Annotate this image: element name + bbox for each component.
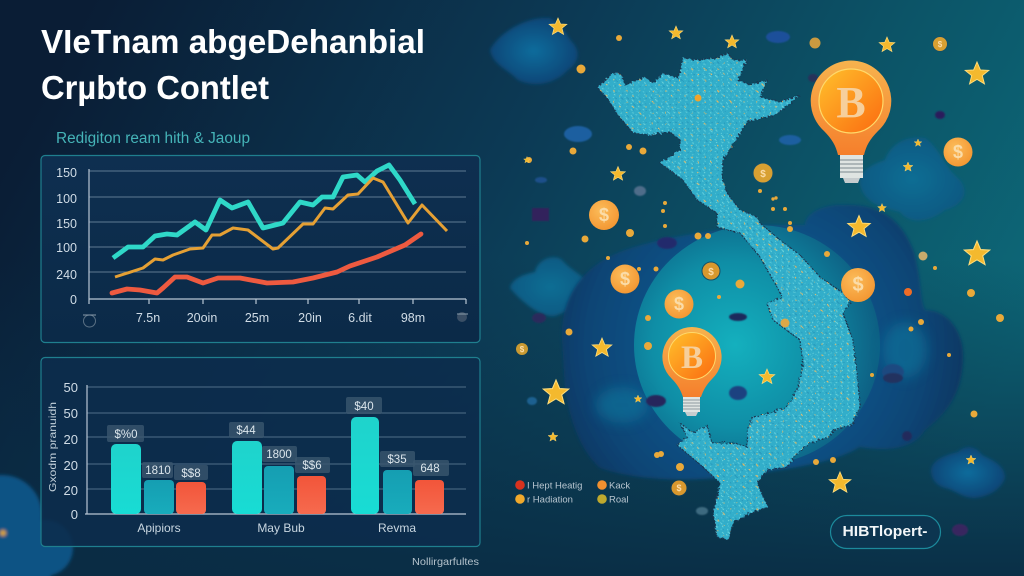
x axis labels: [136, 311, 425, 325]
value labels: 1810: [145, 465, 171, 477]
category labels: Apipiors: [137, 521, 181, 535]
group 1 bars: [111, 444, 206, 514]
value labels: 648: [420, 463, 440, 475]
cloud: bottom-left corner: [0, 475, 73, 576]
cloud: top-left of map: [490, 18, 578, 84]
panel: line chart: [41, 156, 480, 342]
x axis labels: 20in: [298, 311, 322, 325]
y axis labels: [56, 166, 77, 307]
icons: coins: $: [953, 142, 963, 162]
category labels: Revma: [378, 521, 416, 535]
teal line series: [113, 165, 415, 258]
badge: HIBTlopert-: [842, 524, 928, 540]
icons: coins: [516, 36, 972, 496]
x axis labels: 98m: [401, 311, 425, 325]
icon: small lightbulb with coin: [662, 327, 722, 416]
title: Crµbto Contlet: [41, 69, 269, 106]
icons: coins: $: [676, 483, 682, 493]
y axis labels: 150: [56, 166, 77, 180]
icons: stars: [524, 18, 990, 492]
icons: coins: $: [708, 267, 714, 278]
y axis labels: [64, 380, 78, 522]
cloud: lower-left of map: [510, 257, 591, 316]
y axis labels: 20: [64, 458, 78, 473]
y axis labels: 0: [71, 507, 78, 522]
dark smudges: [527, 31, 968, 536]
x axis labels: 7.5n: [136, 311, 160, 325]
y axis labels: 240: [56, 268, 77, 282]
y axis labels: 50: [64, 406, 78, 421]
icon: large lightbulb with coin: B: [836, 78, 866, 127]
legend: Kack: [609, 480, 630, 492]
x axis labels: 6.dit: [348, 311, 372, 325]
group 2 bars: [232, 441, 326, 514]
scattered gold dots: [525, 35, 1004, 471]
panel: bar chart: [41, 358, 480, 546]
value labels: $44: [236, 425, 256, 437]
cloud: right of big bulb: [860, 137, 964, 220]
legend: [515, 480, 630, 506]
icons: coins: $: [852, 274, 864, 296]
cloud: lower-right: [931, 447, 1005, 498]
red line series: [112, 234, 421, 293]
category labels: May Bub: [257, 521, 305, 535]
icon: small lightbulb with coin: B: [681, 340, 703, 376]
icons: coins: $: [760, 169, 766, 180]
x axis labels: 25m: [245, 311, 269, 325]
icons: coins: $: [674, 294, 684, 314]
value labels: $35: [387, 454, 407, 466]
icon: axis marker right: [457, 312, 468, 322]
value labels: $$8: [181, 468, 201, 480]
badge: [830, 516, 940, 548]
icon: large lightbulb with coin: [811, 60, 891, 183]
legend: Roal: [609, 494, 629, 506]
legend: r Hadiation: [527, 494, 573, 506]
y axis labels: 20: [64, 432, 78, 447]
rotated axis title: Gxodm pranuidh: [48, 402, 59, 492]
y axis labels: 150: [56, 217, 77, 231]
y axis labels: 20: [64, 483, 78, 498]
icons: coins: $: [938, 40, 943, 49]
category labels: [137, 521, 416, 535]
inner teal circle: [634, 225, 880, 465]
orange line series: [115, 178, 447, 277]
map of Vietnam: [597, 53, 860, 540]
y axis labels: 100: [56, 241, 77, 255]
glow patches in blob: [596, 322, 927, 423]
value labels: $$6: [302, 460, 322, 472]
x axis labels: 20oin: [187, 311, 217, 325]
y axis labels: 0: [70, 293, 77, 307]
footer note: Nollirgarfultes: [412, 557, 479, 568]
value labels: $%0: [114, 429, 138, 441]
large dark blue blob behind map: [562, 205, 963, 480]
legend: I Hept Heatig: [527, 480, 582, 492]
icon: axis marker left: [83, 315, 96, 327]
subtitle: Redigiton ream hith & Jaoup: [56, 130, 250, 147]
y axis labels: 50: [64, 380, 78, 395]
value labels: [107, 397, 449, 480]
value labels: 1800: [266, 449, 292, 461]
icons: coins: $: [520, 345, 525, 354]
title: VIeTnam abgeDehanbial: [41, 23, 425, 60]
icons: coins: $: [620, 269, 630, 289]
value labels: $40: [354, 401, 374, 413]
icons: coins: $: [599, 205, 609, 225]
title: [41, 23, 425, 106]
group 3 bars: [351, 417, 444, 514]
y axis labels: 100: [56, 192, 77, 206]
